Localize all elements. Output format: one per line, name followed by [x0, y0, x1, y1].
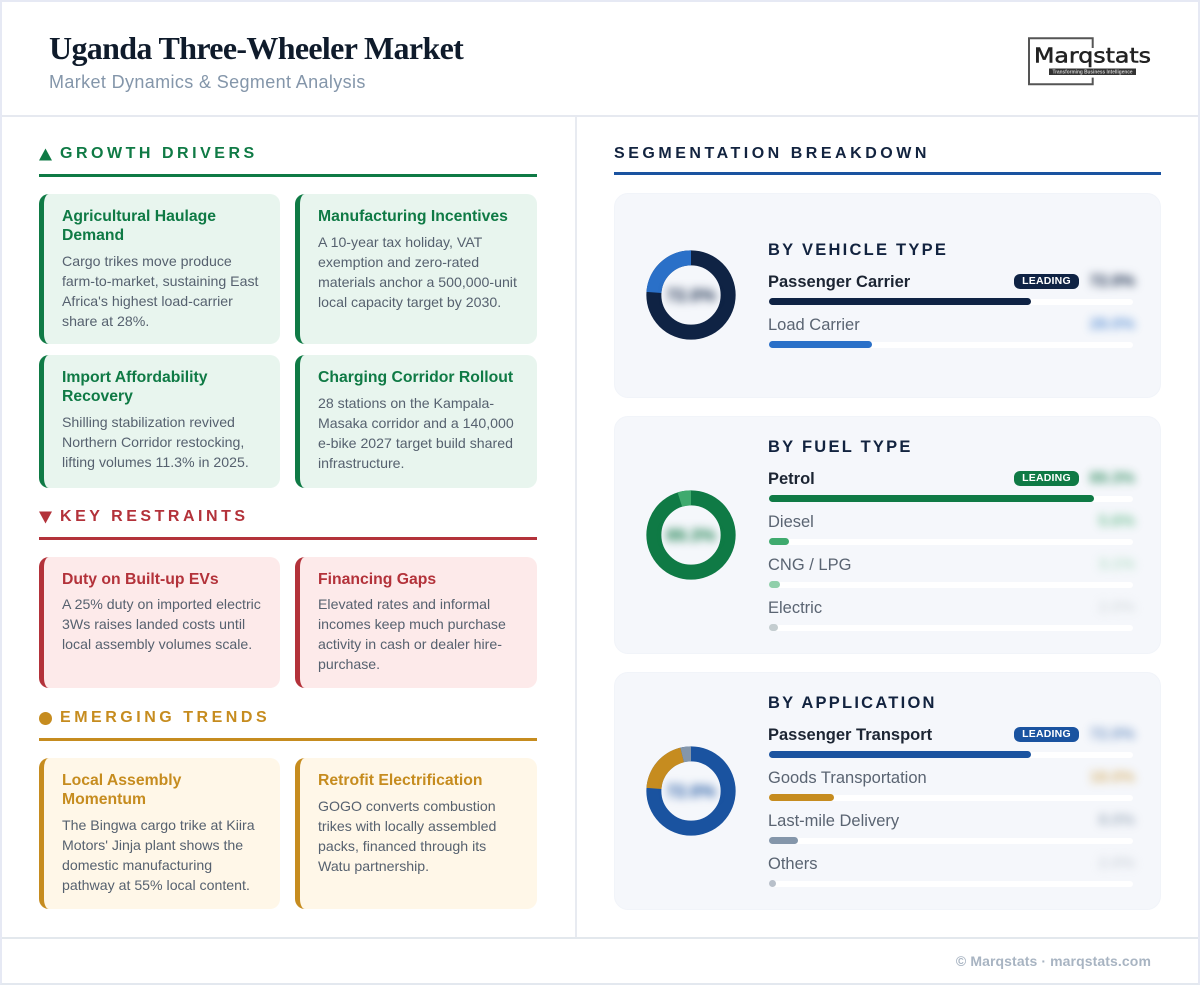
card: agricultural haulage demand: farm-to-market, sustaining East	[62, 272, 258, 288]
card: import affordability recovery: Recovery	[62, 388, 133, 404]
card: retrofit electrification: packs, financed through its	[318, 838, 486, 854]
heading: emerging trends: EMERGING TRENDS	[60, 709, 270, 726]
donut: application	[646, 746, 736, 836]
card: duty on built-up EVs: 3Ws raises landed costs until	[62, 616, 245, 632]
card: local assembly momentum	[39, 758, 280, 909]
card: manufacturing incentives: exemption and zero-rated	[318, 254, 479, 270]
card: local assembly momentum: domestic manufacturing	[62, 856, 212, 872]
card: manufacturing incentives: local capacity target by 2030.	[318, 294, 501, 310]
row: CNG / LPG: CNG / LPG	[768, 556, 851, 574]
row: last-mile delivery: Last-mile Delivery	[768, 812, 899, 830]
card: duty on built-up EVs: Duty on Built-up EVs	[62, 570, 219, 588]
heading: by application: BY APPLICATION	[768, 694, 937, 712]
text: 89.3%	[1090, 470, 1135, 487]
card: retrofit electrification	[295, 758, 537, 909]
card: agricultural haulage demand	[39, 194, 280, 344]
card: local assembly momentum: Motors' Jinja plant shows the	[62, 836, 243, 852]
row: goods transportation: Goods Transportation	[768, 769, 927, 787]
logo: Marqstats: Transforming Business Intelligence	[1052, 70, 1133, 76]
row: passenger carrier: Passenger Carrier	[768, 273, 910, 291]
donut: application: 72.0%	[666, 781, 717, 801]
card: charging corridor rollout: Masaka corridor and a 140,000	[318, 414, 514, 430]
text: 28.0%	[1090, 316, 1135, 333]
donut: fuel type	[646, 490, 736, 580]
text: 2.0%	[1099, 599, 1135, 616]
card: local assembly momentum: Local Assembly	[62, 772, 181, 788]
card: charging corridor rollout: 28 stations on the Kampala-	[318, 394, 494, 410]
text: LEADING	[1022, 728, 1071, 740]
card: financing gaps: activity in cash or dealer hire-	[318, 636, 502, 652]
card: agricultural haulage demand: share at 28%.	[62, 312, 149, 328]
card: agricultural haulage demand: Cargo trikes move produce	[62, 252, 232, 268]
text: LEADING	[1022, 275, 1071, 287]
row: electric: Electric	[768, 598, 822, 616]
donut: vehicle type: 72.0%	[666, 285, 717, 305]
card: duty on built-up EVs: local assembly volumes scale.	[62, 636, 252, 652]
card: charging corridor rollout: infrastructure.	[318, 454, 404, 470]
card: financing gaps: Financing Gaps	[318, 570, 436, 588]
text: 8.0%	[1099, 812, 1135, 829]
card: local assembly momentum: The Bingwa cargo trike at Kiira	[62, 816, 255, 832]
text: 18.0%	[1090, 769, 1135, 786]
card: local assembly momentum: pathway at 55% local content.	[62, 876, 250, 892]
card: financing gaps: purchase.	[318, 656, 380, 672]
card: agricultural haulage demand: Agricultural Haulage	[62, 208, 216, 224]
card: manufacturing incentives	[295, 194, 537, 344]
text: 72.0%	[1090, 726, 1135, 743]
logo: Marqstats: Marqstats	[1034, 44, 1151, 68]
card: duty on built-up EVs	[39, 557, 280, 688]
title: Uganda Three-Wheeler Market	[49, 30, 463, 66]
heading: by fuel type: BY FUEL TYPE	[768, 438, 913, 456]
logo: Marqstats	[1028, 37, 1151, 86]
heading: by vehicle type: BY VEHICLE TYPE	[768, 241, 948, 259]
footer credit: © Marqstats · marqstats.com	[956, 953, 1151, 969]
panel: by vehicle type	[614, 193, 1161, 398]
card: duty on built-up EVs: A 25% duty on imported electric	[62, 596, 261, 612]
card: import affordability recovery: Import Affordability	[62, 368, 208, 386]
card: retrofit electrification: GOGO converts combustion	[318, 798, 496, 814]
footer divider	[2, 937, 1198, 939]
card: retrofit electrification: trikes with locally assembled	[318, 818, 496, 834]
donut: vehicle type	[646, 250, 736, 340]
row: passenger transport: Passenger Transport	[768, 726, 932, 744]
subtitle: Market Dynamics & Segment Analysis	[49, 72, 366, 92]
card: import affordability recovery: Northern Corridor restocking,	[62, 434, 244, 450]
card: agricultural haulage demand: Africa's highest load-carrier	[62, 292, 233, 308]
card: local assembly momentum: Momentum	[62, 790, 146, 808]
row: petrol: Petrol	[768, 470, 815, 488]
text: 72.0%	[1090, 273, 1135, 290]
donut: fuel type: 89.3%	[666, 525, 717, 545]
column divider	[575, 117, 577, 938]
panel: by fuel type	[614, 416, 1161, 654]
row: load carrier: Load Carrier	[768, 316, 860, 334]
heading: key restraints: KEY RESTRAINTS	[60, 508, 249, 525]
text: 2.0%	[1099, 855, 1135, 872]
heading: segmentation breakdown: SEGMENTATION BREAKDOWN	[614, 145, 930, 162]
header divider	[2, 115, 1198, 117]
card: charging corridor rollout: e-bike 2027 target build shared	[318, 434, 513, 450]
text: 3.1%	[1099, 556, 1135, 573]
text: 5.6%	[1099, 513, 1135, 530]
text: LEADING	[1022, 472, 1071, 484]
card: financing gaps	[295, 557, 537, 688]
card: import affordability recovery: Shilling stabilization revived	[62, 414, 235, 430]
card: import affordability recovery: lifting volumes 11.3% in 2025.	[62, 454, 249, 470]
card: charging corridor rollout: Charging Corridor Rollout	[318, 368, 513, 386]
card: retrofit electrification: Watu partnership.	[318, 858, 429, 874]
card: retrofit electrification: Retrofit Electrification	[318, 772, 483, 788]
card: manufacturing incentives: A 10-year tax holiday, VAT	[318, 234, 482, 250]
card: import affordability recovery	[39, 355, 280, 488]
card: charging corridor rollout	[295, 355, 537, 488]
heading: growth drivers: GROWTH DRIVERS	[60, 145, 258, 162]
row: others: Others	[768, 855, 818, 873]
card: manufacturing incentives: materials anchor a 500,000-unit	[318, 274, 517, 290]
card: financing gaps: Elevated rates and informal	[318, 596, 490, 612]
card: manufacturing incentives: Manufacturing Incentives	[318, 208, 508, 224]
card: agricultural haulage demand: Demand	[62, 226, 124, 244]
card: financing gaps: incomes keep much purchase	[318, 616, 506, 632]
panel: by application	[614, 672, 1161, 910]
row: diesel: Diesel	[768, 513, 814, 531]
